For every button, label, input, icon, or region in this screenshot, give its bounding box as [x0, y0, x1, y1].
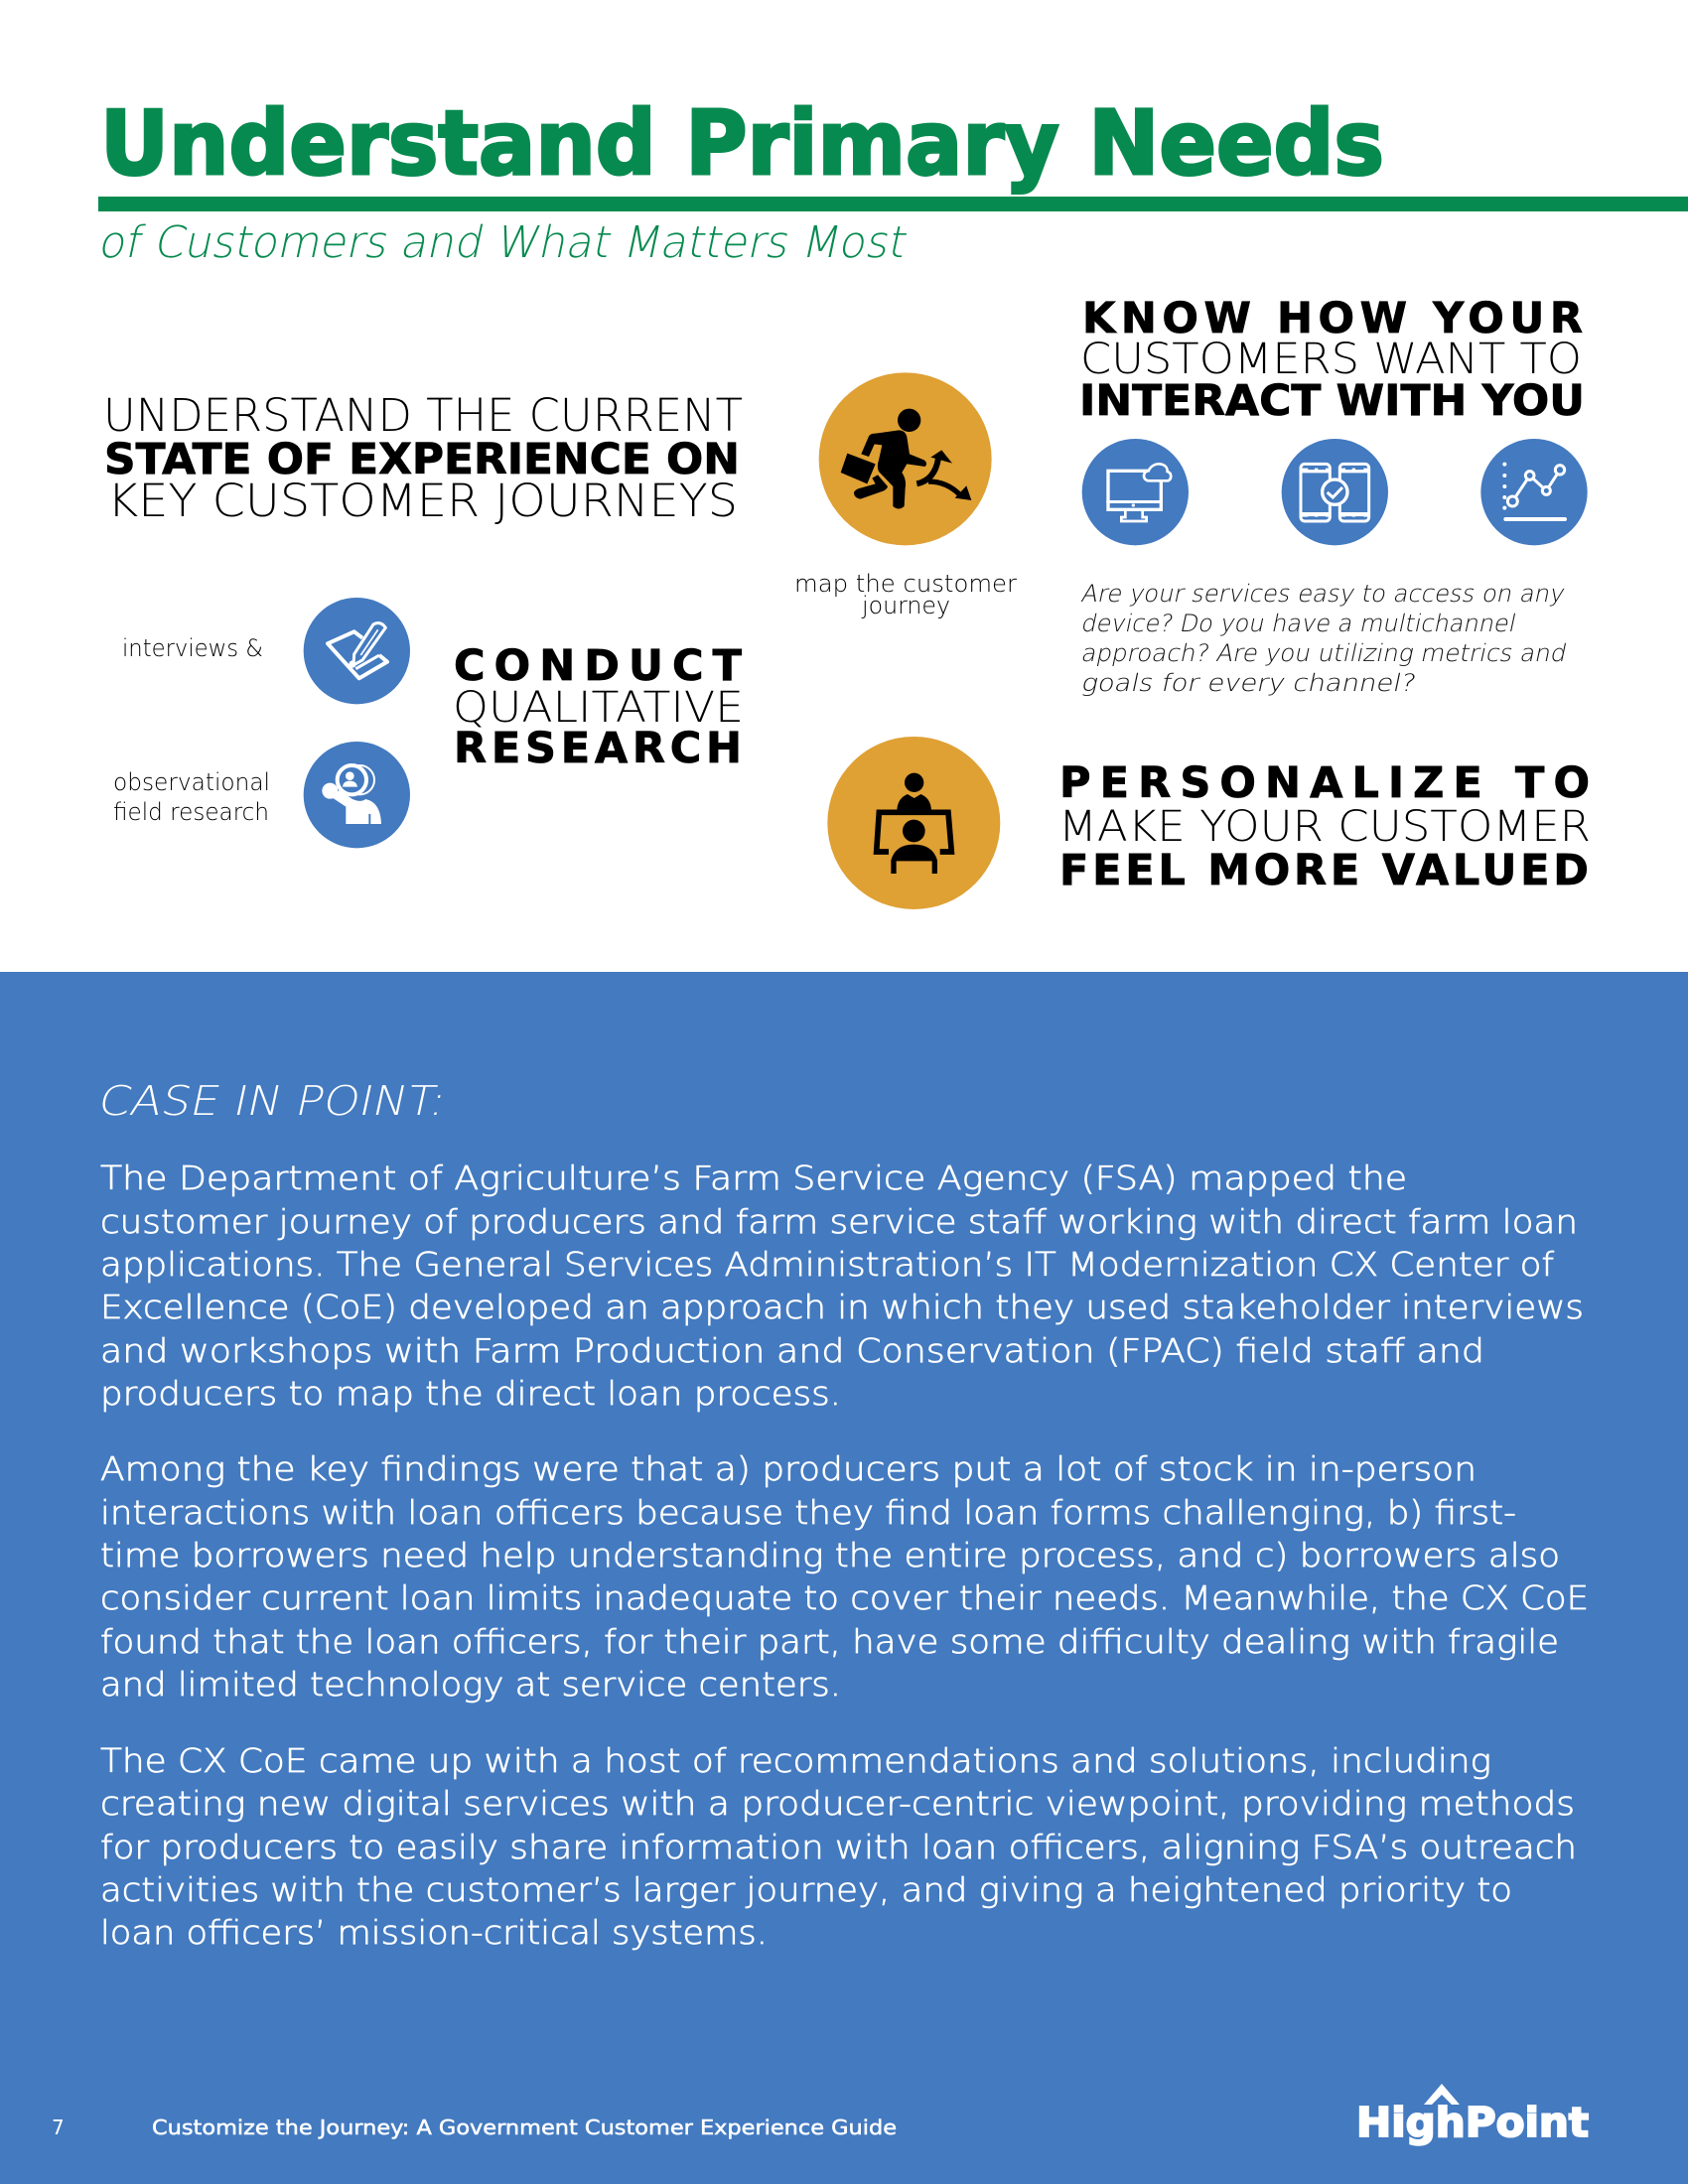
- icon: phones with check badge: [1282, 439, 1388, 545]
- paragraph two: found that the loan officers, for their part, have some difficulty dealing with fragile: [100, 1622, 1559, 1661]
- heading: conduct qualitative research: RESEARCH: [454, 724, 742, 773]
- label: map the customer journey: map the customer: [794, 570, 1017, 598]
- paragraph three: The CX CoE came up with a host of recommendations and solutions, including: [100, 1741, 1491, 1780]
- heading: understand the current state: UNDERSTAND THE CURRENT: [103, 389, 743, 442]
- case heading: CASE IN POINT:: [94, 1077, 451, 1125]
- heading: conduct qualitative research: [453, 641, 744, 773]
- paragraph three: loan officers’ mission-critical systems.: [100, 1913, 768, 1952]
- paragraph two: Among the key findings were that a) producers put a lot of stock in in-person: [100, 1449, 1477, 1488]
- paragraph one: The Department of Agriculture’s Farm Service Agency (FSA) mapped the: [100, 1159, 1407, 1197]
- paragraph two: and limited technology at service centers.: [100, 1665, 841, 1704]
- subtitle: of Customers and What Matters Most: [95, 217, 912, 268]
- text: channel questions: device? Do you have a multichannel: [1079, 609, 1519, 637]
- paragraph three: for producers to easily share information with loan officers, aligning FSA’s outreach: [100, 1828, 1577, 1866]
- paragraph one: and workshops with Farm Production and Conservation (FPAC) field staff and: [100, 1331, 1484, 1370]
- heading: know how your customers: KNOW HOW YOUR: [1082, 294, 1583, 343]
- paragraph two: interactions with loan officers because they find loan forms challenging, b) first-: [100, 1493, 1516, 1532]
- label: observational field research: field research: [113, 798, 269, 826]
- paragraph one: producers to map the direct loan process.: [100, 1374, 841, 1413]
- text: channel questions: Are your services easy to access on any: [1079, 579, 1568, 608]
- logo: HighPoint: HighPoint: [1356, 2099, 1589, 2146]
- heading: personalize: MAKE YOUR CUSTOMER: [1058, 802, 1591, 852]
- paragraph two: time borrowers need help understanding the entire process, and c) borrowers also: [100, 1536, 1560, 1574]
- heading: know how your customers: INTERACT WITH YOU: [1079, 376, 1585, 426]
- text: channel questions: [1079, 579, 1570, 697]
- paragraph three: creating new digital services with a producer-centric viewpoint, providing methods: [100, 1784, 1575, 1823]
- heading: conduct qualitative research: CONDUCT: [454, 641, 743, 691]
- paragraph one: [100, 1159, 1584, 1413]
- paragraph two: consider current loan limits inadequate to cover their needs. Meanwhile, the CX CoE: [100, 1578, 1589, 1617]
- paragraph three: activities with the customer’s larger journey, and giving a heightened priority to: [100, 1870, 1512, 1909]
- icon: monitor and cloud: [1082, 439, 1189, 545]
- heading: understand the current state: [103, 389, 743, 527]
- panel: case in point: [0, 972, 1688, 2184]
- heading: know how your customers: CUSTOMERS WANT TO: [1080, 335, 1582, 384]
- title rule: [98, 197, 1688, 211]
- footer page number: 7: [52, 2116, 65, 2139]
- icon: runner with branching arrows: [819, 372, 992, 545]
- heading: personalize: PERSONALIZE TO: [1059, 758, 1590, 808]
- paragraph one: customer journey of producers and farm service staff working with direct farm loan: [100, 1202, 1578, 1241]
- icon: metrics line chart: [1480, 439, 1588, 545]
- text: channel questions: goals for every channel?: [1079, 668, 1419, 697]
- heading: understand the current state: KEY CUSTOMER JOURNEYS: [107, 475, 738, 527]
- paragraph one: applications. The General Services Administration’s IT Modernization CX Center of: [100, 1245, 1554, 1284]
- paragraph three: [100, 1741, 1577, 1952]
- label: interviews: interviews &: [122, 634, 263, 662]
- footer guide title: Customize the Journey: A Government Customer Experience Guide: [152, 2116, 897, 2139]
- heading: personalize: [1058, 758, 1591, 895]
- paragraph one: Excellence (CoE) developed an approach in which they used stakeholder interviews: [100, 1288, 1584, 1326]
- heading: know how your customers: [1079, 294, 1585, 426]
- text: channel questions: approach? Are you utilizing metrics and: [1079, 638, 1570, 667]
- heading: understand the current state: STATE OF EXPERIENCE ON: [104, 435, 740, 484]
- heading: conduct qualitative research: QUALITATIVE: [453, 683, 744, 733]
- title: Understand Primary Needs: [100, 91, 1384, 195]
- label: map the customer journey: [794, 570, 1017, 619]
- label: observational field research: observational: [113, 768, 270, 796]
- icon: interviews notepad and pencil: [304, 598, 410, 704]
- icon: observational field research: [304, 742, 410, 848]
- label: observational field research: [113, 768, 270, 826]
- paragraph two: [100, 1449, 1589, 1704]
- heading: personalize: FEEL MORE VALUED: [1059, 846, 1589, 895]
- icon: two people at a table: [827, 737, 1000, 909]
- label: map the customer journey: journey: [861, 592, 950, 619]
